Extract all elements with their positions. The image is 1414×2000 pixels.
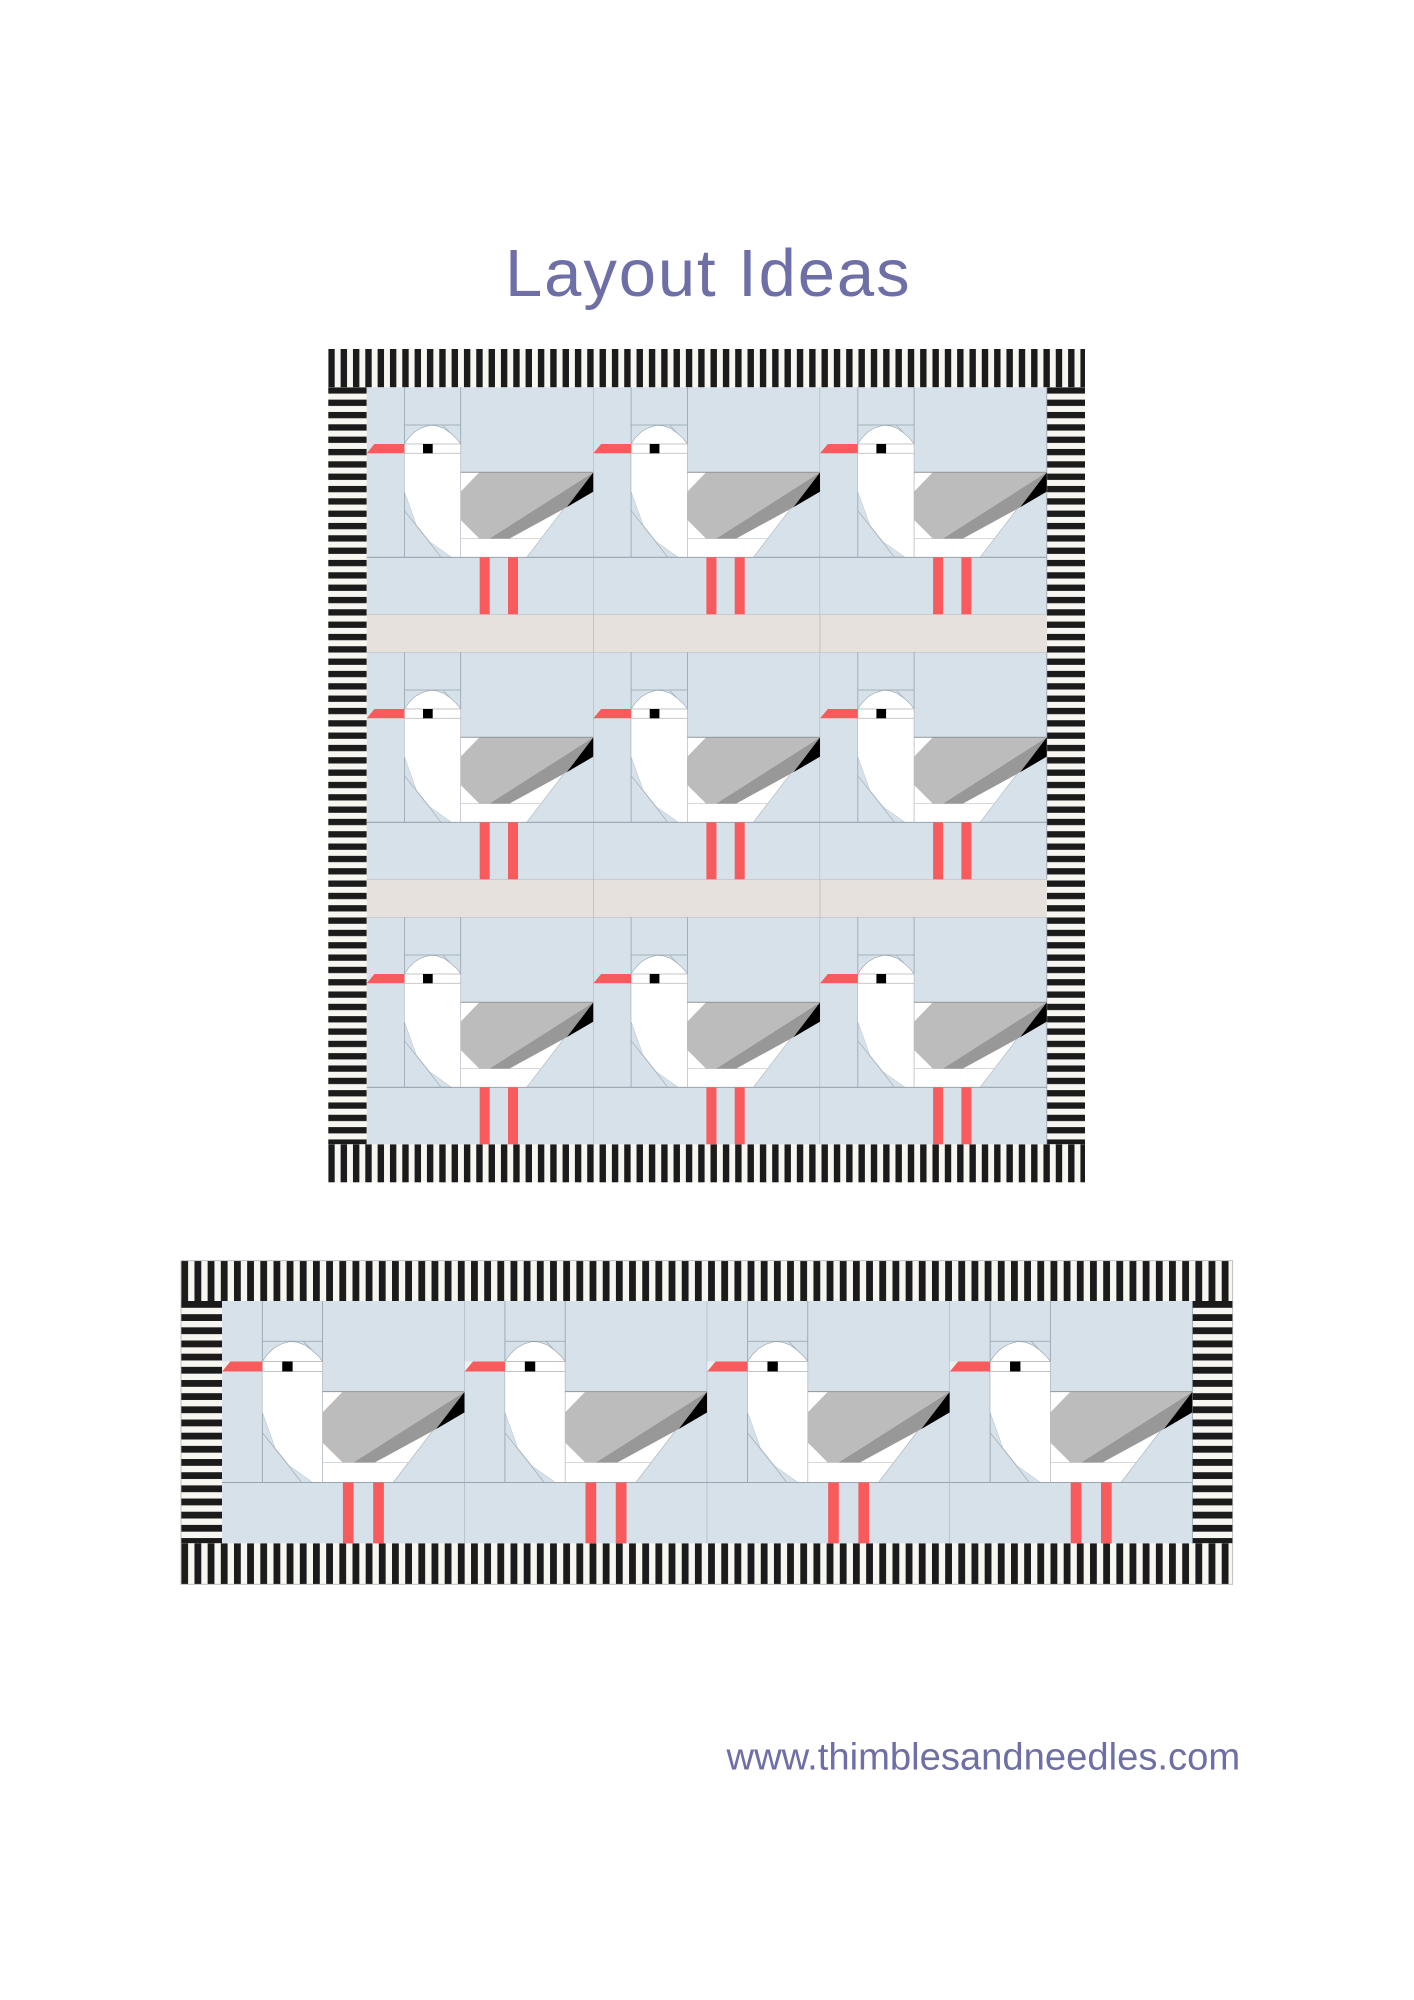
seagull block 1: [222, 1301, 465, 1543]
seagull block 3: [707, 1301, 950, 1543]
left striped border: [181, 1301, 222, 1543]
sashing strip 2: [367, 879, 1047, 917]
seagull block row 1 column 2: [593, 387, 820, 614]
panel: table runner layout: [181, 1261, 1233, 1584]
seagull block row 2 column 2: [593, 652, 820, 879]
seagull block row 3 column 1: [367, 917, 593, 1144]
website address: www.thimblesandneedles.com: [726, 1736, 1240, 1778]
sashing strip 1: [367, 614, 1047, 652]
left striped border: [328, 387, 367, 1144]
seagull block 2: [465, 1301, 707, 1543]
seagull block row 2 column 3: [820, 652, 1047, 879]
bottom striped border: [328, 1144, 1085, 1182]
top striped border: [328, 349, 1085, 387]
title: Layout Ideas: [505, 236, 911, 311]
right striped border: [1047, 387, 1085, 1144]
seagull block row 1 column 1: [367, 387, 593, 614]
seagull block row 3 column 3: [820, 917, 1047, 1144]
seagull block 4: [950, 1301, 1192, 1543]
bottom striped border: [181, 1543, 1233, 1584]
seagull block row 3 column 2: [593, 917, 820, 1144]
quilt outline: [181, 1261, 1233, 1584]
seagull block row 2 column 1: [367, 652, 593, 879]
top striped border: [181, 1261, 1233, 1301]
panel: square quilt layout: [328, 349, 1085, 1182]
right striped border: [1192, 1301, 1233, 1543]
seagull block row 1 column 3: [820, 387, 1047, 614]
